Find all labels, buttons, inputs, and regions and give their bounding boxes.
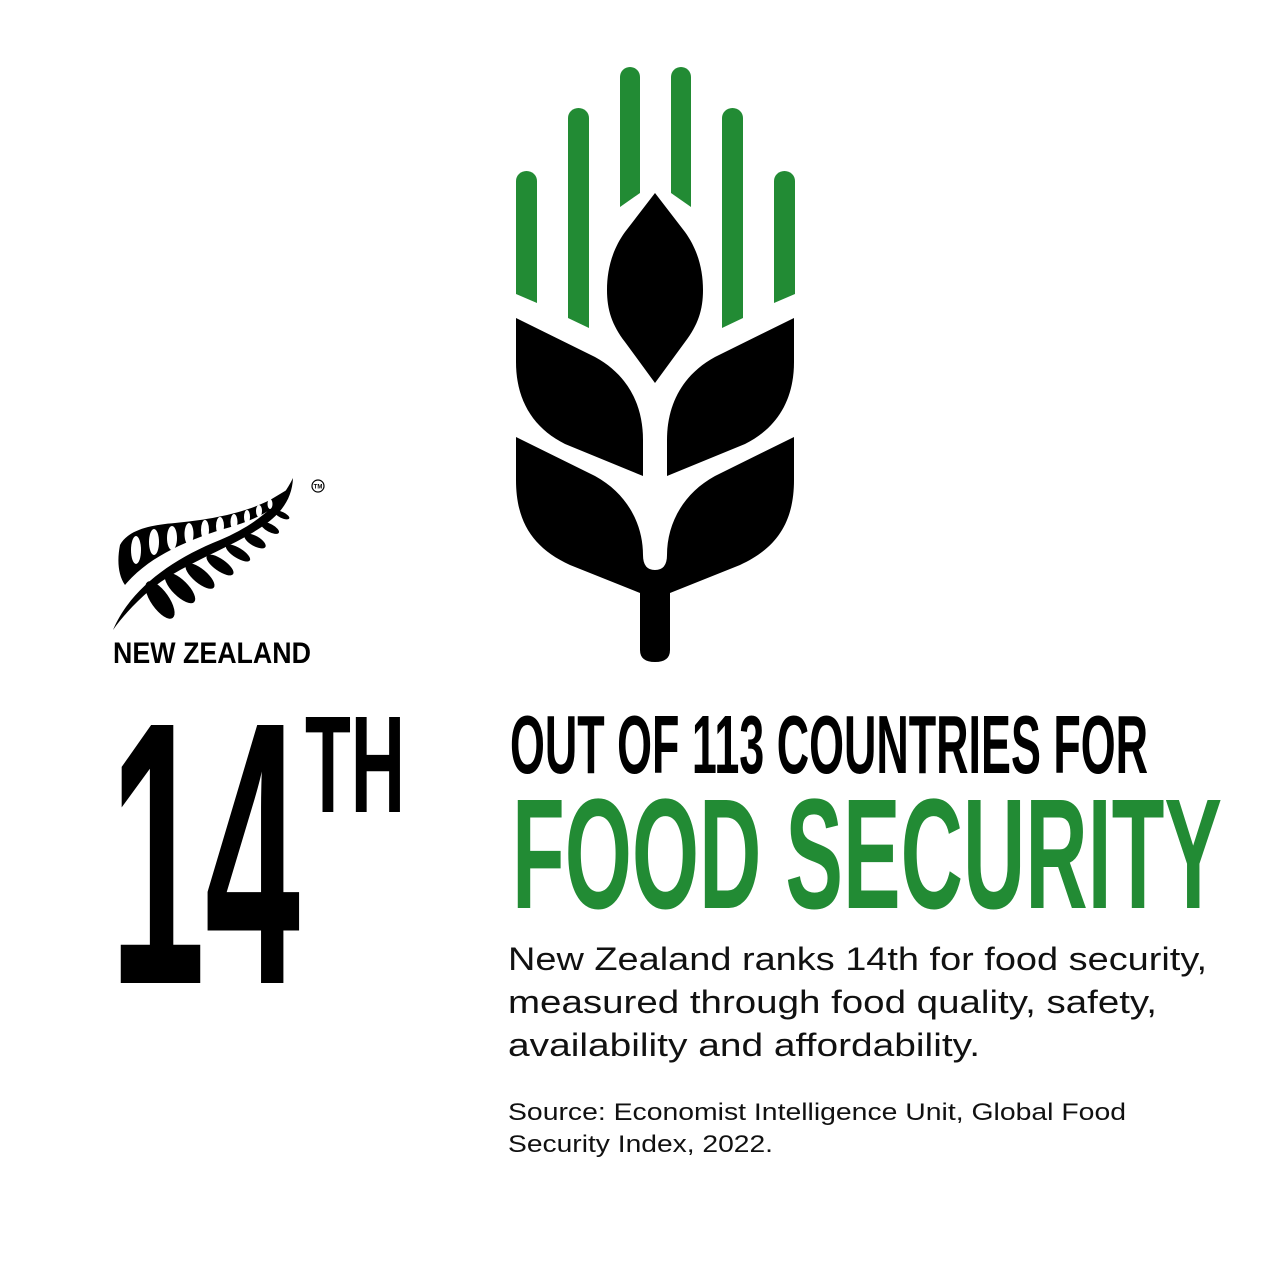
black leaves: [516, 193, 794, 662]
source: Source: Economist Intelligence Unit, Global Food: [508, 1099, 1126, 1126]
logo text: NEW ZEALAND: [113, 637, 311, 670]
logo: New Zealand fern: [113, 478, 324, 670]
body text: [508, 941, 1207, 1063]
trademark: [312, 480, 324, 492]
source: [508, 1099, 1126, 1158]
fern: [113, 478, 293, 630]
body text: availability and affordability.: [508, 1027, 980, 1063]
icon: wheat: [516, 67, 795, 662]
rank: 14th: TH: [305, 688, 405, 842]
green grain bars: [516, 67, 795, 328]
rank: 14th: 14: [110, 645, 301, 1063]
body text: New Zealand ranks 14th for food security,: [508, 941, 1207, 977]
trademark: TM: [314, 484, 322, 490]
source: Security Index, 2022.: [508, 1131, 773, 1158]
body text: measured through food quality, safety,: [508, 984, 1157, 1020]
